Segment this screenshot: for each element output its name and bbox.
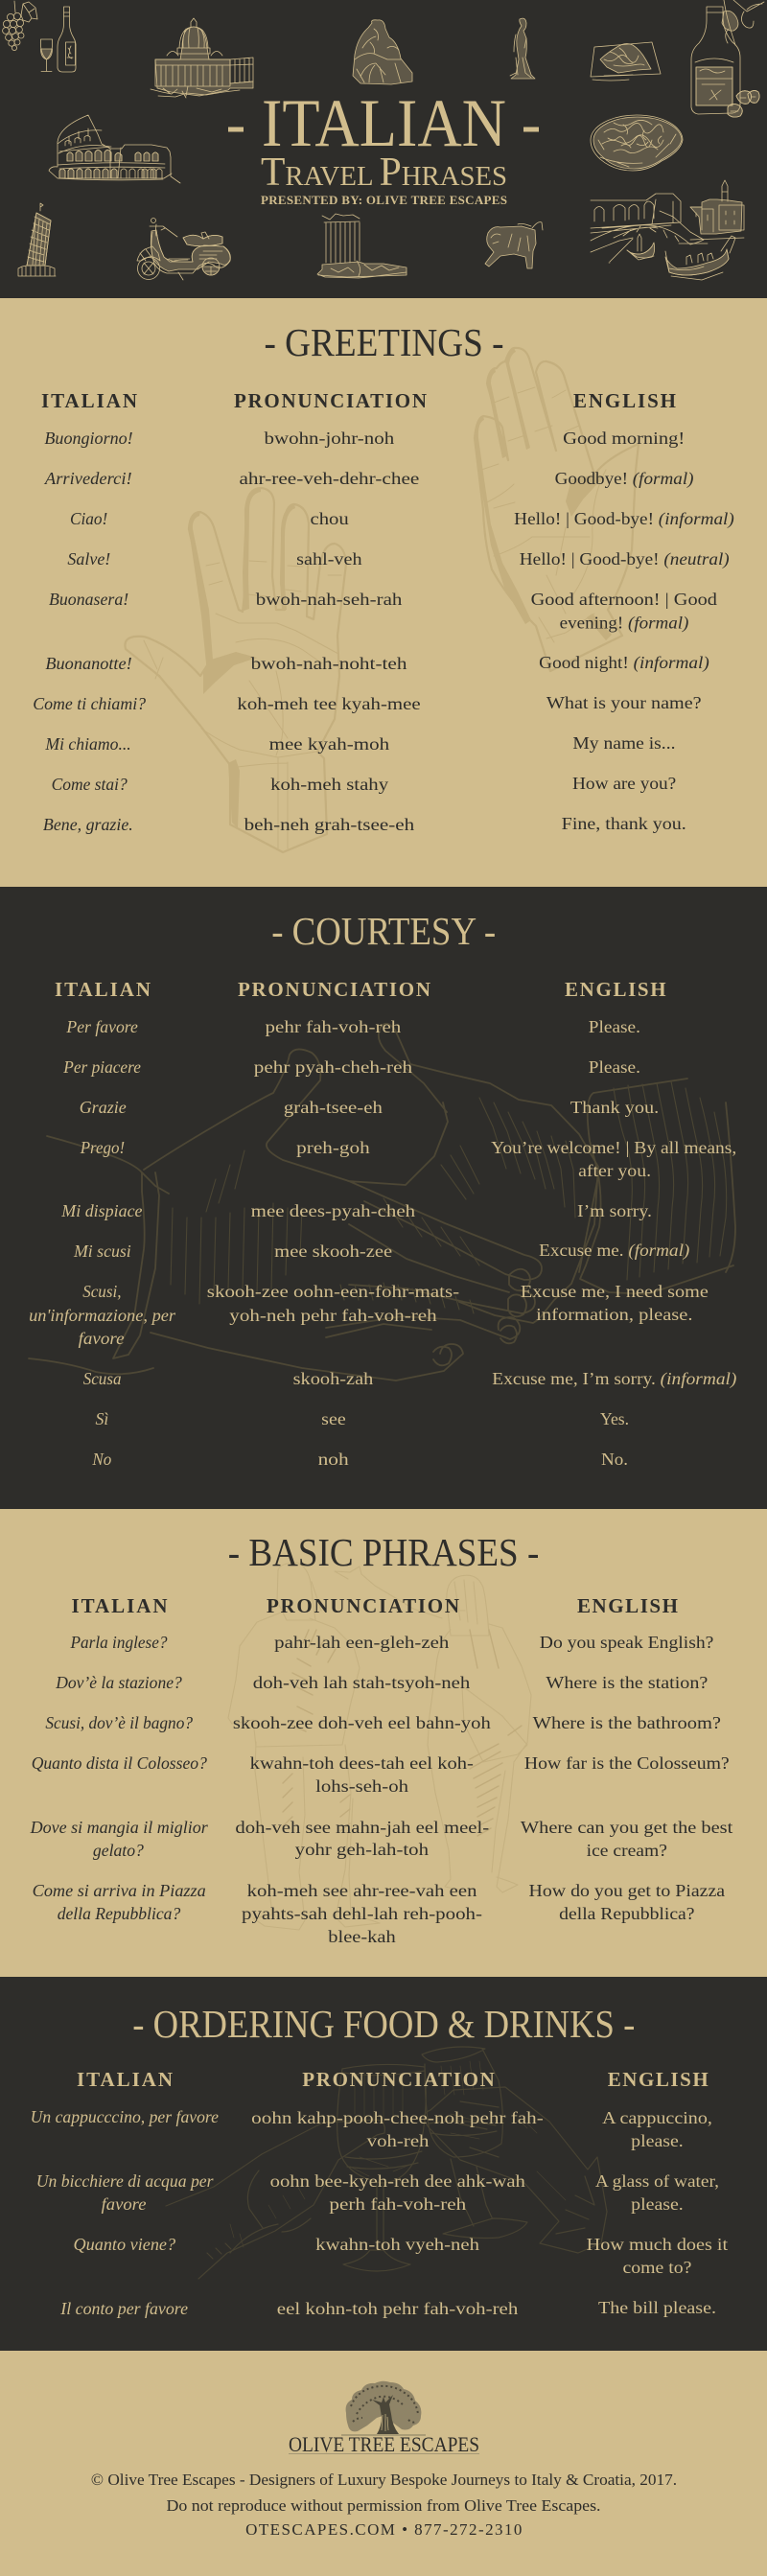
row: glass of water: Un bicchiere di acqua per bbox=[36, 2171, 214, 2191]
row: Scusi un'informazione: favore bbox=[79, 1329, 125, 1348]
row: Grazie: Thank you. bbox=[570, 1098, 659, 1117]
section heading: - BASIC PHRASES - bbox=[228, 1530, 539, 1574]
row: Buonanotte bbox=[45, 653, 709, 673]
row: Dove si mangia: yohr geh-lah-toh bbox=[295, 1840, 429, 1859]
row: Mi scusi bbox=[73, 1241, 689, 1261]
icon: David statue bbox=[510, 18, 535, 79]
row: Prego: after you. bbox=[578, 1161, 651, 1180]
table header: PRONUNCIATION bbox=[238, 978, 430, 1001]
row: cappuccino bbox=[31, 2107, 712, 2150]
icon: pasta plate bbox=[591, 42, 661, 81]
row: Dov'è la stazione: Where is the station? bbox=[546, 1673, 708, 1692]
row: Per piacere: pehr pyah-cheh-reh bbox=[254, 1057, 412, 1077]
row: Ciao: Hello! | Good-bye! (informal) bbox=[514, 509, 734, 529]
row: Come si arriva: Come si arriva in Piazza bbox=[33, 1881, 206, 1900]
row: Scusi un'informazione: skooh-zee oohn-een-fohr-mats- bbox=[207, 1282, 459, 1301]
row: Come stai: How are you? bbox=[572, 774, 676, 793]
presented by line: PRESENTED BY: OLIVE TREE ESCAPES bbox=[261, 193, 507, 207]
contact line: OTESCAPES.COM • 877-272-2310 bbox=[245, 2520, 522, 2539]
row: Bene grazie: Bene, grazie. bbox=[43, 815, 133, 834]
row: cappuccino: voh-reh bbox=[367, 2131, 430, 2150]
row: Prego: You’re welcome! | By all means, bbox=[491, 1138, 736, 1157]
row: Il conto: The bill please. bbox=[598, 2298, 716, 2317]
row: No: No bbox=[91, 1450, 111, 1469]
row: Ciao: chou bbox=[311, 509, 349, 528]
table header: ENGLISH bbox=[608, 2068, 709, 2091]
row: Grazie: Grazie bbox=[80, 1098, 127, 1117]
row: Come si arriva: blee-kah bbox=[328, 1927, 396, 1946]
row: Come si arriva bbox=[33, 1881, 725, 1946]
row: Prego bbox=[80, 1138, 736, 1180]
table header bbox=[71, 1594, 678, 1617]
row: cappuccino: oohn kahp-pooh-chee-noh pehr fah- bbox=[251, 2108, 544, 2127]
row: Salve: sahl-veh bbox=[296, 549, 362, 569]
row: Buonanotte: Buonanotte! bbox=[45, 654, 132, 673]
row: cappuccino: A cappuccino, bbox=[602, 2108, 712, 2127]
row: Come si arriva: della Repubblica? bbox=[58, 1904, 180, 1923]
panel: basic phrases bbox=[0, 1509, 767, 1977]
row: cappuccino: please. bbox=[631, 2131, 684, 2150]
row: Come ti chiami: Come ti chiami? bbox=[33, 694, 146, 713]
row: Buonasera: Buonasera! bbox=[49, 590, 128, 609]
table header: ITALIAN bbox=[71, 1594, 167, 1617]
row: Arrivederci bbox=[44, 469, 693, 489]
row: Scusi dov'è il bagno bbox=[45, 1713, 721, 1732]
table header: ITALIAN bbox=[55, 978, 151, 1001]
row: Scusi un'informazione: Excuse me, I need some bbox=[521, 1282, 709, 1301]
logo wordmark: OLIVE TREE ESCAPES bbox=[289, 2432, 479, 2456]
table header: ENGLISH bbox=[577, 1594, 678, 1617]
row: Come ti chiami bbox=[33, 693, 702, 713]
row: Quanto viene bbox=[73, 2235, 728, 2277]
subtitle: TRAVEL PHRASES bbox=[261, 151, 507, 195]
row: Dove si mangia: ice cream? bbox=[587, 1841, 667, 1860]
row: Si: see bbox=[321, 1409, 346, 1428]
row: Scusi dov'è il bagno: Scusi, dov’è il bagno? bbox=[45, 1713, 193, 1732]
icon: wine bottle and glass bbox=[40, 7, 76, 72]
row: Come stai: koh-meh stahy bbox=[270, 775, 388, 794]
row: Parla inglese: pahr-lah een-gleh-zeh bbox=[274, 1633, 449, 1652]
row: Si: Sì bbox=[96, 1409, 108, 1428]
row: Per piacere: Please. bbox=[589, 1057, 640, 1077]
panel: ordering food and drinks bbox=[0, 1977, 767, 2351]
row: Si bbox=[96, 1409, 629, 1428]
panel: greetings bbox=[0, 298, 767, 887]
row: Come stai: Come stai? bbox=[52, 775, 128, 794]
row: Mi chiamo: mee kyah-moh bbox=[269, 734, 389, 754]
row: Come ti chiami: What is your name? bbox=[546, 693, 702, 712]
table header: PRONUNCIATION bbox=[234, 389, 427, 412]
section heading: - ORDERING FOOD & DRINKS - bbox=[132, 2002, 635, 2046]
row: Quanto viene: Quanto viene? bbox=[73, 2235, 175, 2254]
row: No: No. bbox=[601, 1450, 628, 1469]
row: Il conto: eel kohn-toh pehr fah-voh-reh bbox=[277, 2299, 518, 2318]
row: Buonasera: bwoh-nah-seh-rah bbox=[256, 590, 402, 609]
watermark: open palm hand bbox=[125, 488, 346, 852]
row: Quanto viene: come to? bbox=[623, 2258, 691, 2277]
icon: Vespa scooter bbox=[137, 219, 230, 280]
row: glass of water: perh fah-voh-reh bbox=[329, 2194, 466, 2214]
row: Scusa: skooh-zah bbox=[293, 1369, 373, 1388]
reproduction notice: Do not reproduce without permission from Olive Tree Escapes. bbox=[167, 2496, 600, 2515]
row: Mi dispiace: I’m sorry. bbox=[577, 1201, 652, 1220]
row: Grazie: grah-tsee-eh bbox=[284, 1098, 383, 1117]
title dash left bbox=[228, 127, 244, 132]
row: Salve bbox=[67, 549, 730, 569]
row: glass of water: please. bbox=[631, 2194, 684, 2214]
row: Buonanotte: bwoh-nah-noht-teh bbox=[251, 654, 407, 673]
row: Arrivederci: Arrivederci! bbox=[44, 469, 132, 488]
row: Quanto viene: How much does it bbox=[587, 2235, 728, 2254]
row: Come stai bbox=[52, 774, 676, 794]
row: Il conto: Il conto per favore bbox=[59, 2299, 188, 2318]
row: Come ti chiami: koh-meh tee kyah-mee bbox=[237, 694, 421, 713]
row: Prego: Prego! bbox=[80, 1138, 125, 1157]
row: glass of water: favore bbox=[102, 2194, 146, 2214]
row: Buonasera: Good afternoon! | Good bbox=[531, 590, 717, 609]
icon: Temple ruins bbox=[317, 214, 407, 278]
table header: ENGLISH bbox=[565, 978, 666, 1001]
watermark: clinking wine glasses bbox=[166, 2047, 607, 2279]
row: Quanto dista il Colosseo: How far is the Colosseum? bbox=[524, 1753, 730, 1773]
row: Per piacere bbox=[62, 1057, 640, 1077]
row: glass of water: oohn bee-kyeh-reh dee ahk-wah bbox=[270, 2171, 525, 2191]
row: Bene grazie: beh-neh grah-tsee-eh bbox=[244, 815, 414, 834]
row: Buongiorno: Buongiorno! bbox=[44, 429, 133, 448]
row: Prego: preh-goh bbox=[296, 1138, 370, 1157]
copyright line: © Olive Tree Escapes - Designers of Luxury Bespoke Journeys to Italy & Croatia, 2017. bbox=[91, 2471, 677, 2489]
table header bbox=[41, 389, 676, 412]
row: glass of water bbox=[36, 2171, 719, 2214]
section heading: - COURTESY - bbox=[271, 909, 496, 953]
row: Mi dispiace: Mi dispiace bbox=[60, 1201, 143, 1220]
row: Per piacere: Per piacere bbox=[62, 1057, 141, 1077]
watermark: back of hand bbox=[475, 348, 639, 671]
icon: olives bbox=[728, 90, 759, 117]
row: Mi scusi: Mi scusi bbox=[73, 1242, 131, 1261]
row: Scusa: Scusa bbox=[83, 1369, 121, 1388]
row: Mi scusi: mee skooh-zee bbox=[274, 1242, 392, 1261]
row: Salve: Hello! | Good-bye! (neutral) bbox=[520, 549, 730, 569]
row: Parla inglese: Parla inglese? bbox=[70, 1633, 167, 1652]
row: Scusi un'informazione: Scusi, bbox=[82, 1282, 121, 1301]
panel: header bbox=[0, 0, 767, 298]
title dash right bbox=[523, 127, 539, 132]
row: Per favore: Please. bbox=[589, 1017, 640, 1036]
icon: Leaning Tower of Pisa bbox=[18, 203, 56, 276]
table header: ITALIAN bbox=[41, 389, 137, 412]
row: Come si arriva: della Repubblica? bbox=[559, 1904, 695, 1923]
row: cappuccino: Un cappucccino, per favore bbox=[31, 2107, 219, 2126]
row: Dov'è la stazione bbox=[55, 1673, 708, 1692]
row: Scusi dov'è il bagno: Where is the bathroom? bbox=[533, 1713, 721, 1732]
row: Quanto dista il Colosseo bbox=[32, 1753, 730, 1796]
row: Dov'è la stazione: Dov’è la stazione? bbox=[55, 1673, 182, 1692]
row: Mi dispiace bbox=[60, 1201, 652, 1220]
icon: olive oil bottle bbox=[691, 7, 740, 114]
row: Mi scusi: Excuse me. (formal) bbox=[539, 1241, 689, 1261]
title word: ITALIAN bbox=[262, 86, 506, 161]
row: Scusa bbox=[83, 1369, 736, 1389]
row: Buonanotte: Good night! (informal) bbox=[539, 653, 709, 673]
row: Mi chiamo: Mi chiamo... bbox=[44, 734, 131, 754]
panel: footer bbox=[0, 2351, 767, 2576]
row: Dove si mangia bbox=[30, 1818, 732, 1860]
icon: pizza bbox=[591, 115, 683, 171]
row: Dov'è la stazione: doh-veh lah stah-tsyoh-neh bbox=[253, 1673, 470, 1692]
icon: olive branch bbox=[722, 0, 764, 45]
table header bbox=[55, 978, 666, 1001]
row: Buonasera bbox=[49, 590, 717, 633]
icon: Rialto bridge with gondolas bbox=[591, 180, 744, 280]
row: Come si arriva: How do you get to Piazza bbox=[529, 1881, 725, 1900]
row: No bbox=[91, 1450, 628, 1469]
row: Scusi dov'è il bagno: skooh-zee doh-veh eel bahn-yoh bbox=[233, 1713, 491, 1732]
table header: PRONUNCIATION bbox=[302, 2068, 495, 2091]
row: glass of water: A glass of water, bbox=[595, 2171, 719, 2191]
row: Si: Yes. bbox=[600, 1409, 629, 1428]
row: Grazie bbox=[80, 1098, 659, 1117]
row: Quanto dista il Colosseo: kwahn-toh dees-tah eel koh- bbox=[250, 1753, 474, 1773]
icon: Colosseum bbox=[49, 115, 180, 183]
section heading: - GREETINGS - bbox=[265, 320, 504, 364]
row: No: noh bbox=[318, 1450, 349, 1469]
row: Mi chiamo: My name is... bbox=[572, 733, 675, 753]
row: Come si arriva: koh-meh see ahr-ree-vah een bbox=[247, 1881, 477, 1900]
row: Arrivederci: ahr-ree-veh-dehr-chee bbox=[240, 469, 419, 488]
row: Quanto dista il Colosseo: lohs-seh-oh bbox=[315, 1776, 408, 1796]
table header bbox=[77, 2068, 709, 2091]
icon: Pieta statue bbox=[353, 20, 412, 84]
table header: ENGLISH bbox=[573, 389, 676, 412]
row: Buongiorno bbox=[44, 429, 685, 448]
row: Come si arriva: pyahts-sah dehl-lah reh-pooh- bbox=[242, 1904, 482, 1923]
row: Parla inglese bbox=[70, 1633, 713, 1652]
row: Dove si mangia: doh-veh see mahn-jah eel meel- bbox=[235, 1818, 489, 1837]
row: Dove si mangia: Dove si mangia il miglior bbox=[30, 1818, 209, 1837]
row: Scusa: Excuse me, I’m sorry. (informal) bbox=[492, 1369, 736, 1389]
row: Quanto dista il Colosseo: Quanto dista il Colosseo? bbox=[32, 1753, 207, 1773]
row: Scusi un'informazione: yoh-neh pehr fah-voh-reh bbox=[229, 1306, 437, 1325]
watermark: offering hand bbox=[29, 1024, 735, 1381]
panel: courtesy bbox=[0, 887, 767, 1509]
row: Buonasera: evening! (formal) bbox=[560, 614, 688, 633]
row: Quanto viene: kwahn-toh vyeh-neh bbox=[315, 2235, 479, 2254]
row: Mi chiamo bbox=[44, 733, 675, 754]
watermark: couple walking bbox=[228, 1563, 531, 1930]
row: Mi dispiace: mee dees-pyah-cheh bbox=[251, 1201, 415, 1220]
row: Scusi un'informazione: information, please. bbox=[536, 1305, 692, 1324]
row: Per favore: pehr fah-voh-reh bbox=[265, 1017, 401, 1036]
row: Parla inglese: Do you speak English? bbox=[540, 1633, 713, 1652]
row: Buongiorno: Good morning! bbox=[563, 429, 685, 448]
row: Dove si mangia: gelato? bbox=[93, 1841, 144, 1860]
row: Bene grazie: Fine, thank you. bbox=[562, 814, 686, 833]
title bbox=[228, 86, 539, 161]
row: Bene grazie bbox=[43, 814, 686, 834]
row: Ciao: Ciao! bbox=[70, 509, 107, 528]
logo: olive tree bbox=[341, 2381, 426, 2435]
row: Scusi un'informazione bbox=[29, 1282, 709, 1348]
row: Per favore bbox=[65, 1017, 640, 1036]
row: Scusi un'informazione: un'informazione, per bbox=[29, 1306, 176, 1325]
row: Arrivederci: Goodbye! (formal) bbox=[555, 469, 693, 489]
row: Per favore: Per favore bbox=[65, 1017, 138, 1036]
row: Ciao bbox=[70, 509, 734, 529]
icon: St Peter's Basilica bbox=[151, 18, 253, 98]
table header: PRONUNCIATION bbox=[267, 1594, 459, 1617]
icon: grapes bbox=[3, 1, 37, 51]
row: Buongiorno: bwohn-johr-noh bbox=[265, 429, 394, 448]
row: Salve: Salve! bbox=[67, 549, 110, 569]
icon: lion bbox=[485, 222, 543, 268]
row: Dove si mangia: Where can you get the best bbox=[521, 1818, 732, 1837]
row: Il conto bbox=[59, 2298, 716, 2318]
table header: ITALIAN bbox=[77, 2068, 173, 2091]
